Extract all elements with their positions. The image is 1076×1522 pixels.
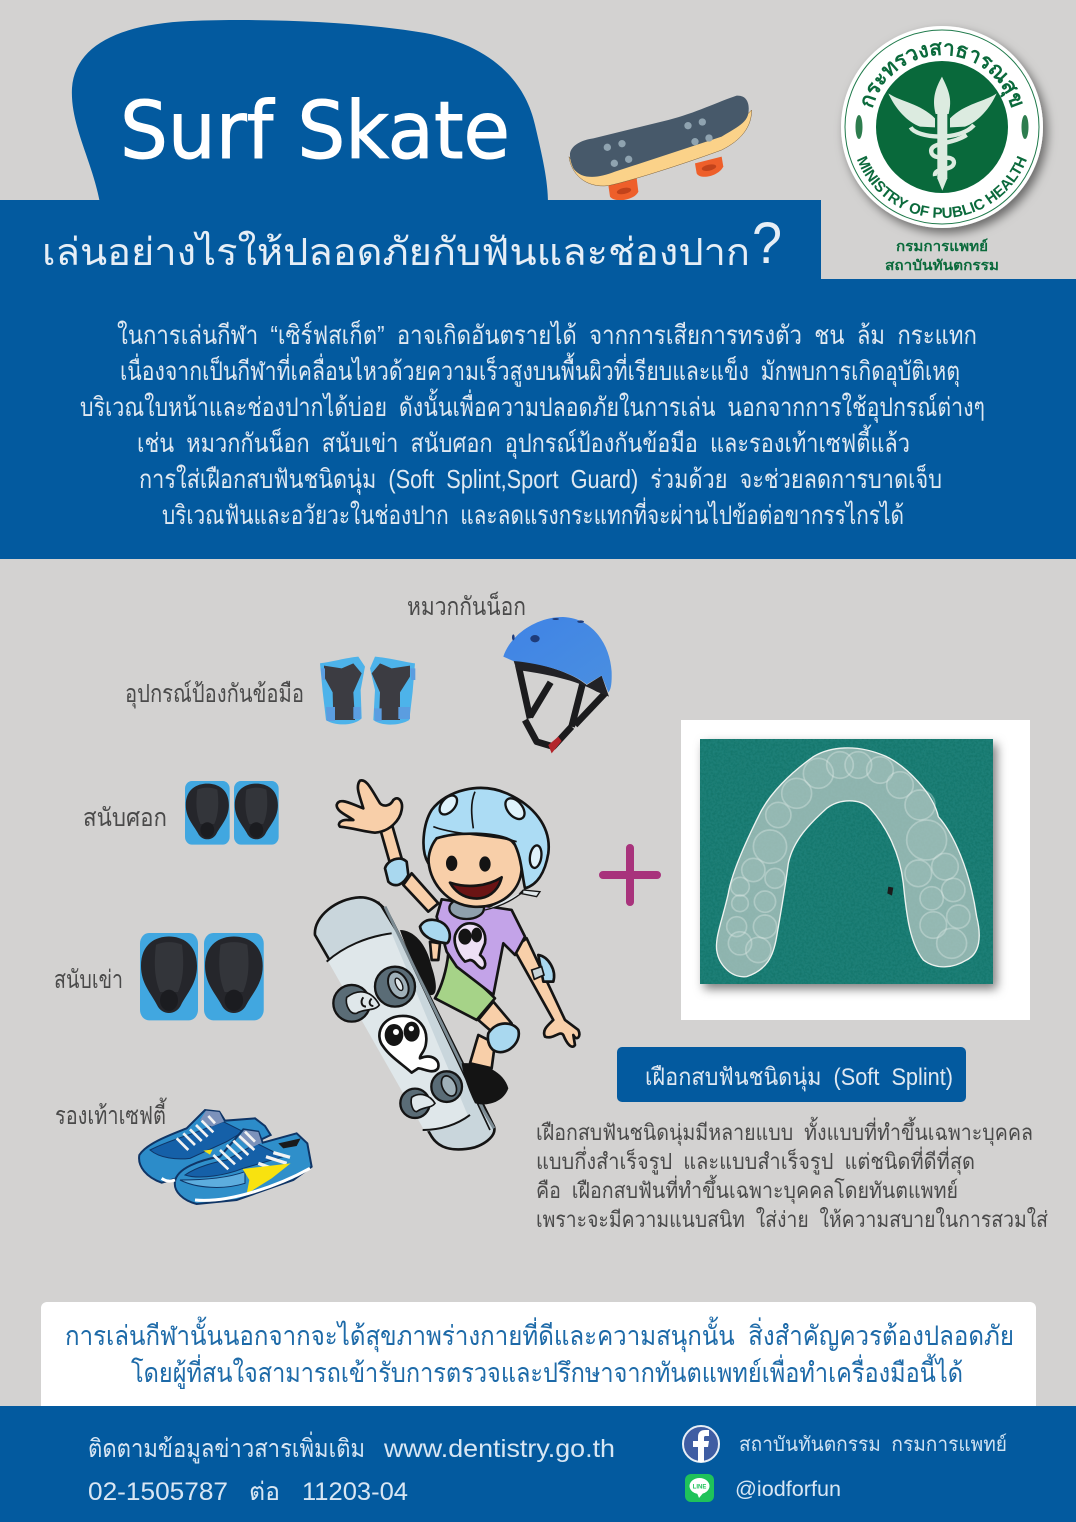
arms and legs — [337, 780, 579, 1104]
Thai ministry name: กระทรวงสาธารณสุข — [862, 42, 1023, 108]
icon: line — [685, 1474, 714, 1502]
description: soft splint: แบบกึ่งสำเร็จรูป และแบบสำเร็จรูป แต่ชนิดที่ดีที่สุด — [536, 1146, 975, 1175]
footer — [0, 1406, 1076, 1522]
intro paragraph: บริเวณฟันและอวัยวะในช่องปาก และลดแรงกระแทกที่จะผ่านไปข้อต่อขากรรไกรได้ — [162, 497, 904, 530]
subtitle: ? — [752, 211, 782, 276]
icon: line: LINE — [693, 1484, 706, 1490]
icon: knee pads — [140, 933, 264, 1020]
contact details: ติดตามข้อมูลข่าวสารเพิ่มเติม — [88, 1431, 365, 1464]
label: knee pad: สนับเข่า — [54, 966, 123, 994]
icon: wrist guards — [320, 657, 415, 725]
shorts — [435, 953, 495, 1020]
label: helmet: หมวกกันน็อก — [407, 591, 526, 621]
contact details: ต่อ — [249, 1478, 280, 1506]
icon: skateboard — [569, 96, 752, 200]
description: soft splint: คือ เฝือกสบฟันที่ทำขึ้นเฉพาะบุคคลโดยทันตแพทย์ — [536, 1175, 958, 1204]
side leaves — [856, 115, 1028, 139]
skull on deck — [379, 1016, 438, 1073]
intro paragraph — [80, 319, 985, 530]
callout: white message box — [41, 1302, 1036, 1406]
icon: elbow pads — [185, 781, 279, 845]
header blob — [72, 20, 548, 203]
description: soft splint — [536, 1117, 1048, 1232]
photo: soft splint — [681, 720, 1030, 1020]
heading: soft splint — [617, 1047, 966, 1102]
contact details: 02-1505787 — [88, 1478, 228, 1506]
department name: กรมการแพทย์ — [896, 238, 988, 254]
heading: soft splint: เฝือกสบฟันชนิดนุ่ม (Soft Splint) — [645, 1064, 953, 1092]
English ministry name: MINISTRY OF PUBLIC HEALTH — [857, 156, 1027, 218]
line account: @iodforfun — [735, 1478, 841, 1501]
icon: facebook — [683, 1426, 719, 1462]
contact details: www.dentistry.go.th — [383, 1435, 615, 1463]
contact details: 11203-04 — [302, 1478, 408, 1506]
label: elbow pad: สนับศอก — [83, 804, 167, 832]
title: Surf Skate: Surf Skate — [120, 85, 510, 177]
label: safety shoes: รองเท้าเซฟตี้ — [55, 1097, 167, 1130]
label: wrist guard: อุปกรณ์ป้องกันข้อมือ — [125, 680, 304, 709]
intro paragraph: การใส่เฝือกสบฟันชนิดนุ่ม (Soft Splint,Sport Guard) ร่วมด้วย จะช่วยลดการบาดเจ็บ — [139, 463, 942, 495]
icon: helmet — [503, 617, 612, 753]
logo: Ministry of Public Health — [838, 24, 1054, 240]
facebook name: สถาบันทันตกรรม กรมการแพทย์ — [739, 1433, 1007, 1456]
skateboard — [315, 897, 494, 1149]
department name: สถาบันทันตกรรม — [885, 257, 999, 273]
emblem: winged caduceus — [888, 77, 997, 191]
department name — [885, 238, 999, 273]
subtitle: เล่นอย่างไรให้ปลอดภัยกับฟันและช่องปาก — [42, 231, 750, 274]
plus sign — [603, 848, 657, 902]
head and helmet — [423, 788, 549, 910]
splint shape — [716, 748, 979, 977]
icon: sports shoes — [139, 1110, 312, 1204]
callout: white message box: โดยผู้ที่สนใจสามารถเข้ารับการตรวจและปรึกษาจากทันตแพทย์เพื่อทำเครื่องมือนี้ได้ — [131, 1353, 963, 1389]
t-shirt — [420, 898, 525, 995]
banner background — [0, 200, 1076, 559]
intro paragraph: เช่น หมวกกันน็อก สนับเข่า สนับศอก อุปกรณ์ป้องกันข้อมือ และรองเท้าเซฟตี้แล้ว — [137, 424, 910, 459]
illustration: skater child — [315, 780, 579, 1149]
contact details — [88, 1431, 615, 1506]
subtitle — [42, 211, 782, 276]
